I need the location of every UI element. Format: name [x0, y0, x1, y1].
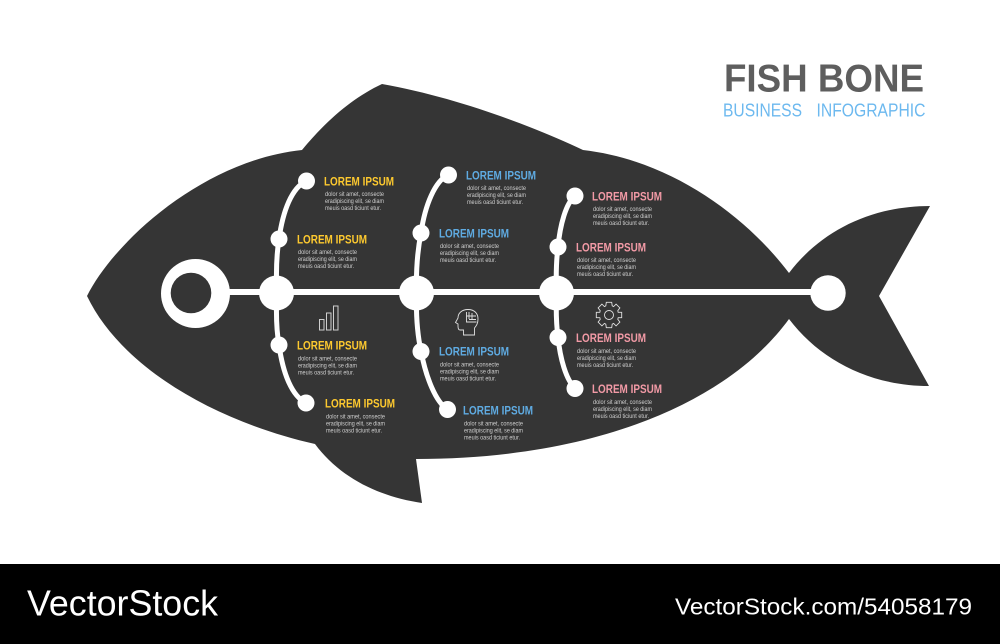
text block: pink 3: meuis oasd ticiunt etur.	[577, 362, 633, 369]
text block: yellow 3: LOREM IPSUM	[297, 340, 367, 352]
text block: pink 2: dolor sit amet, consecte	[577, 257, 637, 264]
text block: pink 3	[576, 333, 646, 369]
text block: pink 2: eradipiscing elit, se diam	[577, 264, 636, 271]
text block: yellow 3	[297, 340, 367, 376]
text block: blue 3: LOREM IPSUM	[439, 346, 509, 358]
text block: pink 1: LOREM IPSUM	[592, 192, 662, 204]
footer bar	[0, 564, 1000, 644]
text block: pink 1: eradipiscing elit, se diam	[593, 213, 652, 220]
text block: pink 3: eradipiscing elit, se diam	[577, 355, 636, 362]
text block: blue 2	[439, 228, 509, 264]
text block: yellow 4	[325, 398, 395, 434]
text block: pink 2: meuis oasd ticiunt etur.	[577, 271, 633, 278]
fish skeleton	[161, 166, 846, 418]
text block: pink 2	[576, 242, 646, 278]
text block: blue 2: dolor sit amet, consecte	[440, 243, 500, 250]
text block: yellow 2: LOREM IPSUM	[297, 234, 367, 246]
text block: yellow 1: dolor sit amet, consecte	[325, 191, 385, 198]
text block: pink 3: dolor sit amet, consecte	[577, 348, 637, 355]
text block: yellow 4: LOREM IPSUM	[325, 398, 395, 410]
text block: yellow 2: meuis oasd ticiunt etur.	[298, 263, 354, 270]
title	[723, 58, 926, 120]
text block: blue 1: eradipiscing elit, se diam	[467, 192, 526, 199]
text block: yellow 2: eradipiscing elit, se diam	[298, 256, 357, 263]
text block: blue 4: LOREM IPSUM	[463, 406, 533, 418]
text block: blue 2: meuis oasd ticiunt etur.	[440, 257, 496, 264]
text block: blue 3: dolor sit amet, consecte	[440, 362, 500, 368]
text block: blue 4: dolor sit amet, consecte	[464, 420, 524, 428]
text block: blue 1: dolor sit amet, consecte	[467, 185, 527, 192]
icon: bar chart	[320, 306, 338, 330]
text block: pink 3: LOREM IPSUM	[576, 333, 646, 345]
text block: blue 3: meuis oasd ticiunt etur.	[440, 376, 496, 382]
text block: pink 1	[592, 192, 662, 227]
text block: pink 4: LOREM IPSUM	[592, 384, 662, 396]
text block: blue 2: eradipiscing elit, se diam	[440, 250, 499, 257]
text block: yellow 2	[297, 234, 367, 270]
text block: yellow 4: dolor sit amet, consecte	[326, 414, 386, 420]
spine nodes	[259, 166, 846, 418]
text block: pink 4: eradipiscing elit, se diam	[593, 406, 652, 413]
subtitle	[723, 100, 926, 120]
footer url: VectorStock.com/54058179	[675, 594, 972, 620]
text block: yellow 1: eradipiscing elit, se diam	[325, 198, 384, 205]
text block: blue 1	[466, 170, 536, 206]
icon: head with chart	[456, 310, 478, 335]
subtitle: BUSINESS	[723, 100, 802, 120]
icon: gear	[596, 302, 622, 328]
head ring	[161, 259, 230, 328]
text block: blue 1: LOREM IPSUM	[466, 170, 536, 182]
subtitle: INFOGRAPHIC	[816, 100, 926, 120]
text block: blue 2: LOREM IPSUM	[439, 228, 509, 240]
text block: pink 4	[592, 384, 662, 420]
text block: pink 4: dolor sit amet, consecte	[593, 399, 653, 406]
text block: yellow 1	[324, 176, 394, 212]
text block: yellow 4: meuis oasd ticiunt etur.	[326, 428, 382, 434]
text block: yellow 3: meuis oasd ticiunt etur.	[298, 370, 354, 376]
text block: blue 3: eradipiscing elit, se diam	[440, 368, 499, 376]
text block: yellow 3: eradipiscing elit, se diam	[298, 362, 357, 370]
text block: pink 2: LOREM IPSUM	[576, 242, 646, 254]
text block: yellow 4: eradipiscing elit, se diam	[326, 420, 385, 428]
text block: yellow 2: dolor sit amet, consecte	[298, 249, 358, 256]
text block: pink 4: meuis oasd ticiunt etur.	[593, 413, 649, 420]
text block: blue 4: eradipiscing elit, se diam	[464, 428, 523, 434]
title: FISH BONE	[724, 58, 924, 100]
text block: blue 4: meuis oasd ticiunt etur.	[464, 434, 520, 442]
text block: blue 4	[463, 406, 533, 442]
text block: yellow 1: meuis oasd ticiunt etur.	[325, 205, 381, 212]
text block: yellow 1: LOREM IPSUM	[324, 176, 394, 188]
text block: pink 1: meuis oasd ticiunt etur.	[593, 220, 649, 227]
fish silhouette	[87, 84, 930, 503]
text block: pink 1: dolor sit amet, consecte	[593, 206, 653, 213]
text block: blue 3	[439, 346, 509, 382]
text block: yellow 3: dolor sit amet, consecte	[298, 356, 358, 362]
text block: blue 1: meuis oasd ticiunt etur.	[467, 199, 523, 206]
footer logo: VectorStock	[27, 582, 219, 624]
